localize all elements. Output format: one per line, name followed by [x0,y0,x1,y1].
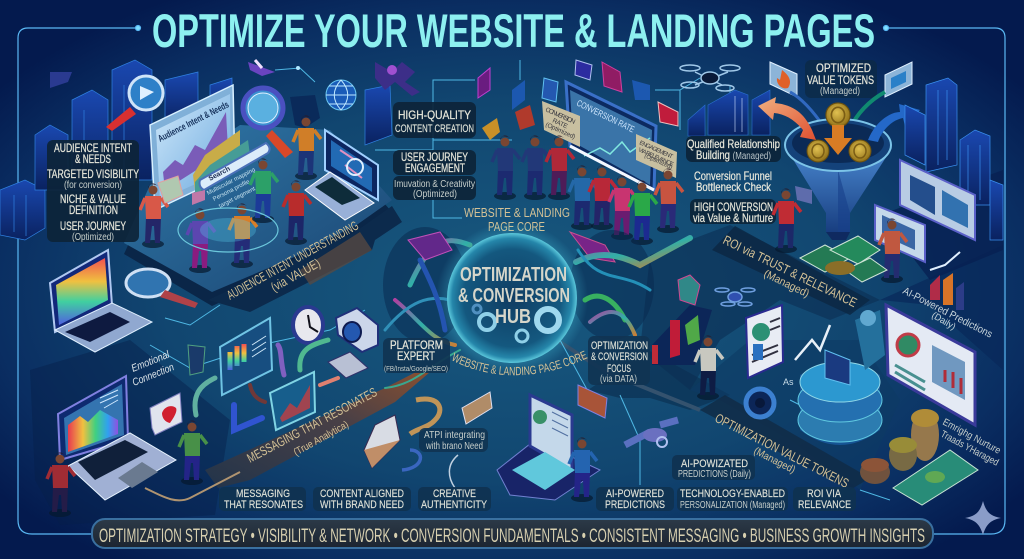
label: qualified relationship building [686,136,781,162]
people lower left [47,420,207,517]
panel: conversion rate board [566,82,656,190]
icon: sparkle star [965,501,1001,535]
label: creative authenticity: AUTHENTICITY [421,499,488,511]
hub tech ribbons left [385,232,470,388]
label: platform expert: PLATFORM [390,338,443,352]
label: ai-powizated predictions: PREDICTIONS (Daily) [678,469,751,480]
label: conversion funnel bottleneck check: Bottleneck Check [696,180,772,194]
label: innovation and creativity [393,176,476,200]
search bar: target segment [218,186,257,210]
funnel [785,103,892,240]
label: optimization and conversion focus: OPTIMIZATION [591,340,648,352]
ribbon label: audience intent understanding: (via VALUE) [268,255,323,295]
label: optimization and conversion focus: & CONVERSION [591,351,648,363]
label: platform expert: (FB/Insta/Google/SEO) [384,364,448,373]
panel: line chart [270,372,315,430]
chart: mini bars top right [930,252,964,310]
tag: conversion rate optimized: CONVERSION [544,106,577,126]
icon: satellite right of globe [375,62,420,96]
coin stacks and cash [860,409,978,505]
arrow: small blue curl [402,450,420,470]
arrow: left orange [758,97,816,140]
icon: satellite [625,420,678,447]
label: high-quality content creation: HIGH-QUALITY [398,108,471,122]
people at audience platform [140,115,321,273]
skyline behind funnel [688,90,770,136]
label: technology-enabled personalization [677,487,788,511]
label: user journey engagement: ENGAGEMENT [405,161,465,175]
search bar: Multiscular mapping [206,167,256,197]
people at conversion board [492,135,683,245]
tablet and person bottom center [497,395,600,502]
tag: engagement via relevance: VIA RELEVANCE [637,147,674,168]
icon: globe [326,80,356,110]
person with dashboard [879,218,907,283]
icon: large magnifier [243,88,293,158]
arrows cluster [195,340,338,430]
search bar: Search [208,166,232,183]
icon: open envelope [364,415,400,468]
ribbon label: optimization value tokens: (Managed) [752,445,797,476]
label: emotional connection [130,348,176,389]
tag: engagement via relevance: (Optimized) [643,153,673,171]
icon: small card [578,385,607,418]
icon: small satellite top [50,60,315,88]
panel: left label stack: NICHE & VALUE [60,192,126,206]
label: creative authenticity: CREATIVE [433,488,476,500]
icon: magnifier on skyline [106,76,163,131]
ribbon label: optimization value tokens: OPTIMIZATION VALUE TOKENS [713,410,852,491]
ribbon label: messaging that resonates: (True Analytica) [292,419,351,459]
panel: right dashboard [875,160,975,262]
label: ai-powizated predictions [672,455,755,480]
label: content aligned with brand need: WITH BRAND NEED [320,499,404,511]
monitor: bar chart [220,318,272,395]
label: emotional connection: Connection [131,361,176,389]
ribbon label: messaging that resonates [244,384,380,466]
ribbon label: audience intent understanding [224,218,361,303]
circuit lines [150,60,890,500]
label: roi via trust and relevance: ROI via TRUST & RELEVANCE [721,232,860,310]
label: As: As [783,377,794,387]
label: content aligned with brand need: CONTENT ALIGNED [320,488,404,500]
label: optimized value tokens: (Managed) [820,86,860,97]
icon: clock [293,307,323,343]
label: roi via trust and relevance [721,232,860,310]
label: ai-powered predictions: PREDICTIONS [605,499,665,511]
city skyline left [0,60,392,240]
ribbon label: optimization value tokens [713,410,852,491]
panel: left label stack: DEFINITION [69,203,118,217]
data cylinder stack [795,310,885,445]
label: high conversion [690,199,776,225]
platforms and connecting ribbons [30,125,1003,525]
label: high-quality content creation: CONTENT CREATION [395,123,474,135]
laptop top left [305,130,378,220]
label: roi via relevance [793,487,856,511]
label: messaging that resonates: MESSAGING [236,488,290,500]
label: ai-powizated predictions: AI-POWIZATED [681,458,748,470]
hub tech ribbons right [570,232,700,335]
bottom banner [92,519,933,548]
chart: 3d bars and presenter [652,305,723,400]
arrow: winding orange [410,399,440,434]
label: platform expert: EXPERT [397,349,436,363]
label: atpi integrating: with brano Need [425,441,483,452]
label: website and landing page core: WEBSITE & LANDING [464,205,570,220]
floating social icons [478,60,678,140]
panel: left label stack: (Optimized) [72,232,114,243]
panel: left label stack: USER JOURNEY [60,219,126,233]
panel: optimization and conversion hub: HUB [495,306,531,328]
label: conversion funnel bottleneck check [694,169,772,194]
hub glow [436,222,588,374]
ribbon label: audience intent understanding: AUDIENCE INTENT UNDERSTANDING [224,218,361,303]
label: high-quality content creation [393,102,476,138]
label: ai-powered predictions ribbon: (Daily) [930,310,958,333]
label: innovation and creativity: Imuvation & Creativity [394,179,475,190]
panel: Audience Intent and Needs chart: Audience Intent & Needs [156,99,231,145]
panel: left label stack: (for conversion) [64,180,122,191]
gears [473,305,559,342]
icon: heart speech bubble [150,393,182,435]
ribbon label: website and landing page core: WEBSITE & LANDING PAGE CORE [452,350,588,376]
label: innovation and creativity: (Optimized) [413,189,457,200]
label: user journey engagement: USER JOURNEY [401,150,468,164]
label: roi via relevance: ROI VIA [807,488,842,500]
label: roi via relevance: RELEVANCE [798,499,851,511]
skyline right [905,78,1003,240]
icon: gear [746,389,774,417]
arrow: down into funnel [824,125,852,155]
icon: dark hologram figure [188,345,205,375]
tag: engagement via relevance: ENGAGEMENT [638,140,674,161]
panel: large monitor dashboard [886,305,975,425]
coins in funnel [807,103,871,162]
ribbon tail [145,472,240,500]
label: optimization and conversion focus: (via DATA) [600,374,637,385]
label: optimization and conversion focus: FOCUS [607,363,631,375]
panel: conversion rate board: CONVERSION RATE [575,98,636,134]
ribbon label: messaging that resonates: MESSAGING THAT RESONATES [244,384,380,466]
panel: left label stack [47,140,139,243]
icon: chip tile [850,62,912,130]
search bar: Persona profile [212,179,251,203]
tag: conversion rate optimized [542,101,580,147]
label: atpi integrating [419,428,488,452]
label: optimized value tokens: VALUE TOKENS [807,73,874,87]
arrow: right blue [868,104,920,142]
label: high conversion: via Value & Nurture [693,211,773,225]
label: optimization and conversion focus [588,336,650,385]
hub surrounding dark tech zones [383,227,654,343]
tag near person [795,186,812,204]
label: technology-enabled personalization: PERSONALIZATION (Managed) [680,500,785,511]
panel: left label stack: TARGETED VISIBILITY [47,167,139,181]
label: optimized value tokens [805,60,877,98]
label: emerging nurture: Traads YHaraged [939,429,1000,469]
tag: conversion rate optimized: (Optimized) [544,121,576,141]
tag: conversion rate optimized: RATE [551,117,569,131]
document panel [746,305,783,378]
panel: optimization and conversion hub: & CONVERSION [458,285,570,307]
label: high conversion: HIGH CONVERSION [694,200,773,214]
label: atpi integrating: ATPI integrating [424,430,485,441]
icon: magnifier lower [126,269,198,308]
label: qualified relationship building: Qualified Relationship [687,137,780,151]
icon: small envelope [462,392,492,424]
panel: Audience Intent and Needs chart [150,85,250,210]
label: platform expert [383,338,450,373]
label: qualified relationship building: Building (Managed) [696,148,771,162]
label: ai-powered predictions [596,487,674,511]
tag: engagement via relevance [636,134,677,178]
label: conversion funnel bottleneck check: Conversion Funnel [694,169,772,183]
icon: camera [336,308,378,352]
icon: dark map shape [290,95,320,128]
label: website and landing page core [464,205,570,234]
laptop: rainbow chart [50,250,152,352]
label: content aligned with brand need [313,487,411,511]
panel: left label stack: AUDIENCE INTENT [54,141,132,155]
label: roi via trust and relevance: (Managed) [762,268,811,300]
panel: optimization and conversion hub [447,233,577,363]
label: ai-powered predictions: AI-POWERED [606,488,664,500]
label: creative authenticity [418,487,491,511]
panel: left label stack: & NEEDS [75,152,111,166]
label: technology-enabled personalization: TECHNOLOGY-ENABLED [680,488,785,500]
label: emerging nurture: Emrighg Nurture [941,417,1003,457]
laptop: wave chart [58,376,176,500]
icon: flame tile [770,62,826,130]
label: messaging that resonates: THAT RESONATES [224,499,303,511]
panel: optimization and conversion hub: OPTIMIZATION [460,264,567,286]
icon: drone small [715,288,755,306]
label: optimized value tokens: OPTIMIZED [816,61,871,75]
curved line near creative [449,455,458,488]
label: messaging that resonates [219,487,306,511]
label: emotional connection: Emotional [130,348,172,375]
search bar [192,143,270,210]
icon: drone [680,65,740,91]
label: ai-powered predictions ribbon: AI-Powered Predictions [901,285,994,341]
money stacks [800,236,887,282]
label: website and landing page core: PAGE CORE [488,219,545,234]
label: user journey engagement [393,150,476,175]
person at funnel [773,188,801,253]
icon: tablet [328,352,368,378]
